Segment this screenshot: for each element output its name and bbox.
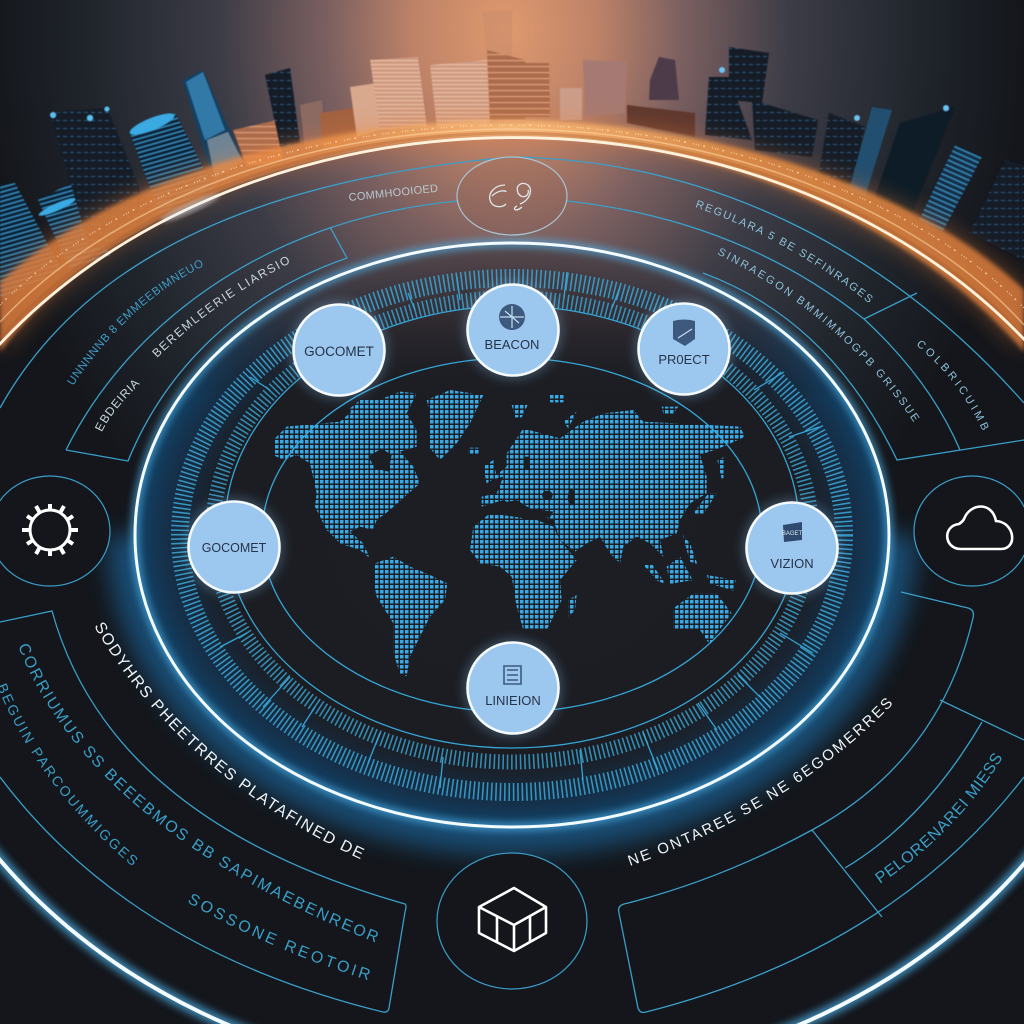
node: Beacon: BEACON (485, 337, 539, 352)
curved text: lower left line one: CORRIUMUS SS BEEEBMOS BB SAPIMAEBENREOR (20, 644, 378, 942)
node: GoComet left: GOCOMET (202, 541, 267, 555)
Eurasia (482, 410, 745, 563)
icon: project shield (673, 320, 695, 346)
South America (373, 557, 447, 676)
Hudson Bay (368, 448, 392, 472)
Australia (673, 593, 732, 645)
icon circle: left sun (0, 476, 110, 586)
panel: lower right (619, 592, 1024, 1012)
curved text: upper left line two: BEREMLEERIE LIARSIO (152, 256, 289, 358)
node: Project: PR0ECT (658, 352, 710, 367)
interior warm top tint (135, 243, 889, 827)
North America (273, 392, 420, 558)
bottom white outer ring (0, 848, 1024, 1024)
node: GoComet upper: GOCOMET (304, 344, 374, 359)
city skyline (0, 10, 1024, 300)
panel: lower left (0, 611, 406, 1012)
icon: beacon compass (499, 304, 525, 330)
curved text: lower left heading: SODYHRS PHEETRRES PLATAFINED DE (96, 622, 364, 859)
curved text: lower right heading: NE ONTAREE SE NE 6EGOMERRES (628, 698, 892, 866)
thin guide rings (220, 272, 819, 788)
Philippines (683, 535, 697, 564)
inland seas (500, 457, 575, 520)
node: Vizion (742, 498, 842, 598)
sky glow (0, 0, 1024, 680)
main white ring (135, 243, 889, 827)
tick ring inner (213, 298, 811, 762)
panel: upper left (66, 201, 457, 461)
curved text: upper left line one: UNNNNNB 8 EMMEEBIMNEUO (67, 260, 202, 384)
node: Project (634, 299, 734, 399)
Japan (693, 493, 717, 514)
icon circle: bottom box (437, 853, 587, 989)
Indonesia (667, 557, 693, 584)
node: Linieion (463, 638, 563, 738)
node: GoComet upper (289, 300, 389, 400)
Greenland (427, 390, 483, 460)
icon: gear sun (22, 504, 78, 556)
dotted world map (273, 390, 745, 676)
icon: cloud (947, 506, 1012, 549)
Africa (470, 513, 577, 630)
tick ring outer (180, 278, 844, 792)
icon: 3D box (479, 888, 546, 951)
node: Linieion: LINIEION (485, 693, 541, 708)
curved text: far right: COLBRICUIMB (918, 340, 988, 430)
curved text: upper right line one: REGULARA 5 BE SEFINRAGES (696, 200, 872, 302)
curved text: upper left short: EBDEIRIA (94, 380, 140, 432)
curved text: lower right blue: PELORENAREI MIESS (874, 753, 1002, 884)
British Isles (483, 460, 497, 483)
icon circle: right cloud (914, 476, 1024, 586)
top capsule badge (457, 157, 567, 235)
curved text: upper right line two: SINRAEGON BMMIMMOGPB GRISSUE (718, 248, 920, 422)
panel: upper right (567, 201, 960, 450)
icon: book (504, 666, 521, 684)
node: GoComet left (184, 497, 284, 597)
node: Beacon (463, 280, 563, 380)
Southeast Asia (643, 563, 665, 583)
curved text: commodity label: COMMHOOIOED (348, 183, 439, 204)
Arctic islands (350, 395, 678, 428)
Kamchatka (717, 457, 725, 479)
Iceland (468, 448, 479, 454)
main ring interior (135, 243, 889, 827)
Madagascar (568, 595, 577, 617)
curved text: lower left line two: SOSSONE REOTOIR (188, 894, 370, 980)
node: Vizion: VIZION (770, 556, 814, 571)
lower main ring glow (135, 535, 889, 827)
icon: squiggle pair (490, 183, 530, 210)
New Guinea (707, 575, 736, 591)
icon: vizion badge: BAGET (782, 531, 803, 537)
panel: upper outer arc (0, 157, 1024, 408)
orange glowing horizon arc (0, 120, 1024, 355)
